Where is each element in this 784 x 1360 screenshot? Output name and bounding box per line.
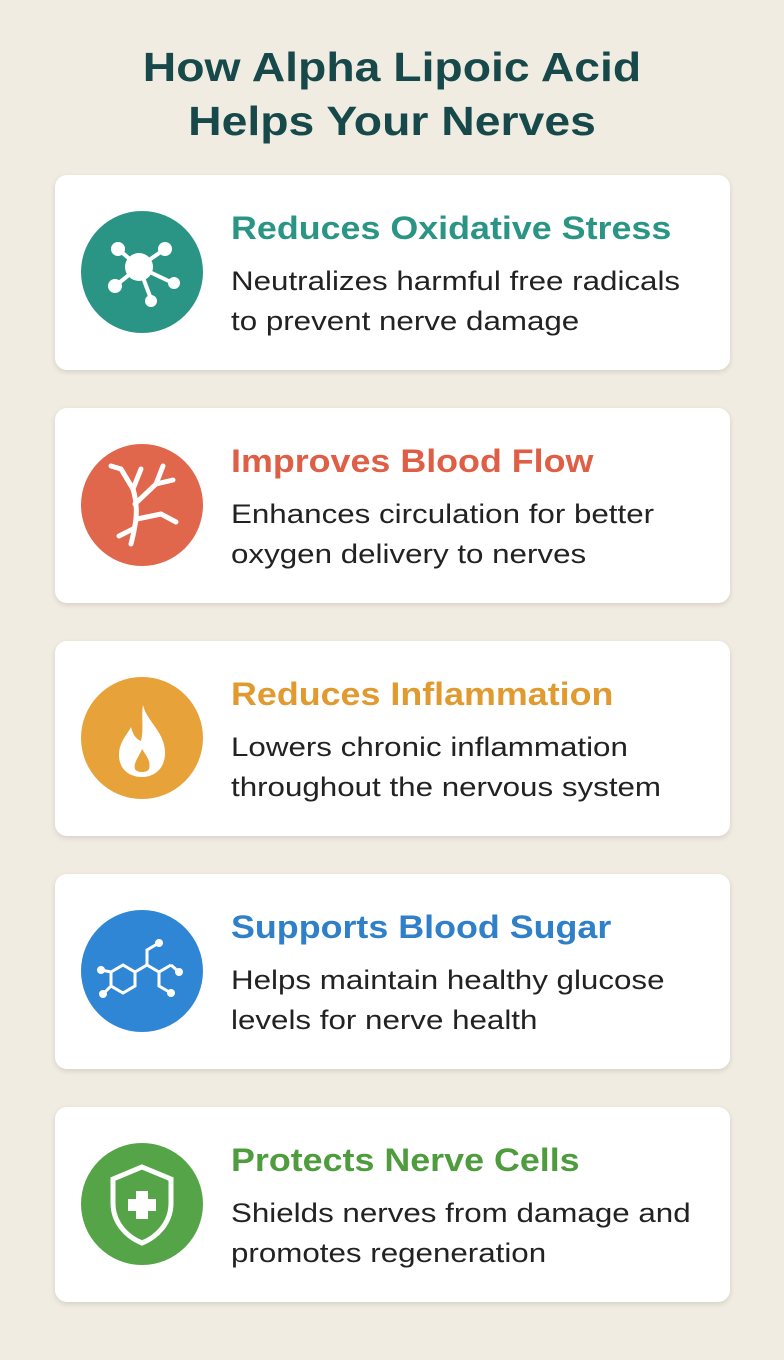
description: to prevent nerve damage <box>231 306 579 336</box>
panel: inflammation <box>55 641 730 836</box>
description <box>231 1198 691 1268</box>
description <box>231 965 665 1035</box>
icon: flame <box>81 677 203 799</box>
heading: Protects Nerve Cells <box>231 1142 580 1178</box>
panel: blood sugar <box>55 874 730 1069</box>
title: How Alpha Lipoic Acid <box>143 44 641 90</box>
panel: protects nerve cells <box>55 1107 730 1302</box>
description: Enhances circulation for better <box>231 499 654 529</box>
icon: molecule <box>81 211 203 333</box>
description: throughout the nervous system <box>231 772 661 802</box>
description: Shields nerves from damage and <box>231 1198 691 1228</box>
title <box>143 44 641 144</box>
heading: Supports Blood Sugar <box>231 909 611 945</box>
description: Neutralizes harmful free radicals <box>231 266 680 296</box>
heading: Improves Blood Flow <box>231 443 593 479</box>
description <box>231 266 680 336</box>
heading: Reduces Inflammation <box>231 676 613 712</box>
description: oxygen delivery to nerves <box>231 539 586 569</box>
icon: glucose structure <box>81 910 203 1032</box>
description: promotes regeneration <box>231 1238 546 1268</box>
panel: oxidative stress <box>55 175 730 370</box>
description <box>231 499 654 569</box>
description <box>231 732 661 802</box>
description: Lowers chronic inflammation <box>231 732 628 762</box>
description: Helps maintain healthy glucose <box>231 965 665 995</box>
icon: shield <box>81 1143 203 1265</box>
heading: Reduces Oxidative Stress <box>231 210 671 246</box>
icon: vessel tree <box>81 444 203 566</box>
description: levels for nerve health <box>231 1005 537 1035</box>
title: Helps Your Nerves <box>188 98 596 144</box>
panel: blood flow <box>55 408 730 603</box>
